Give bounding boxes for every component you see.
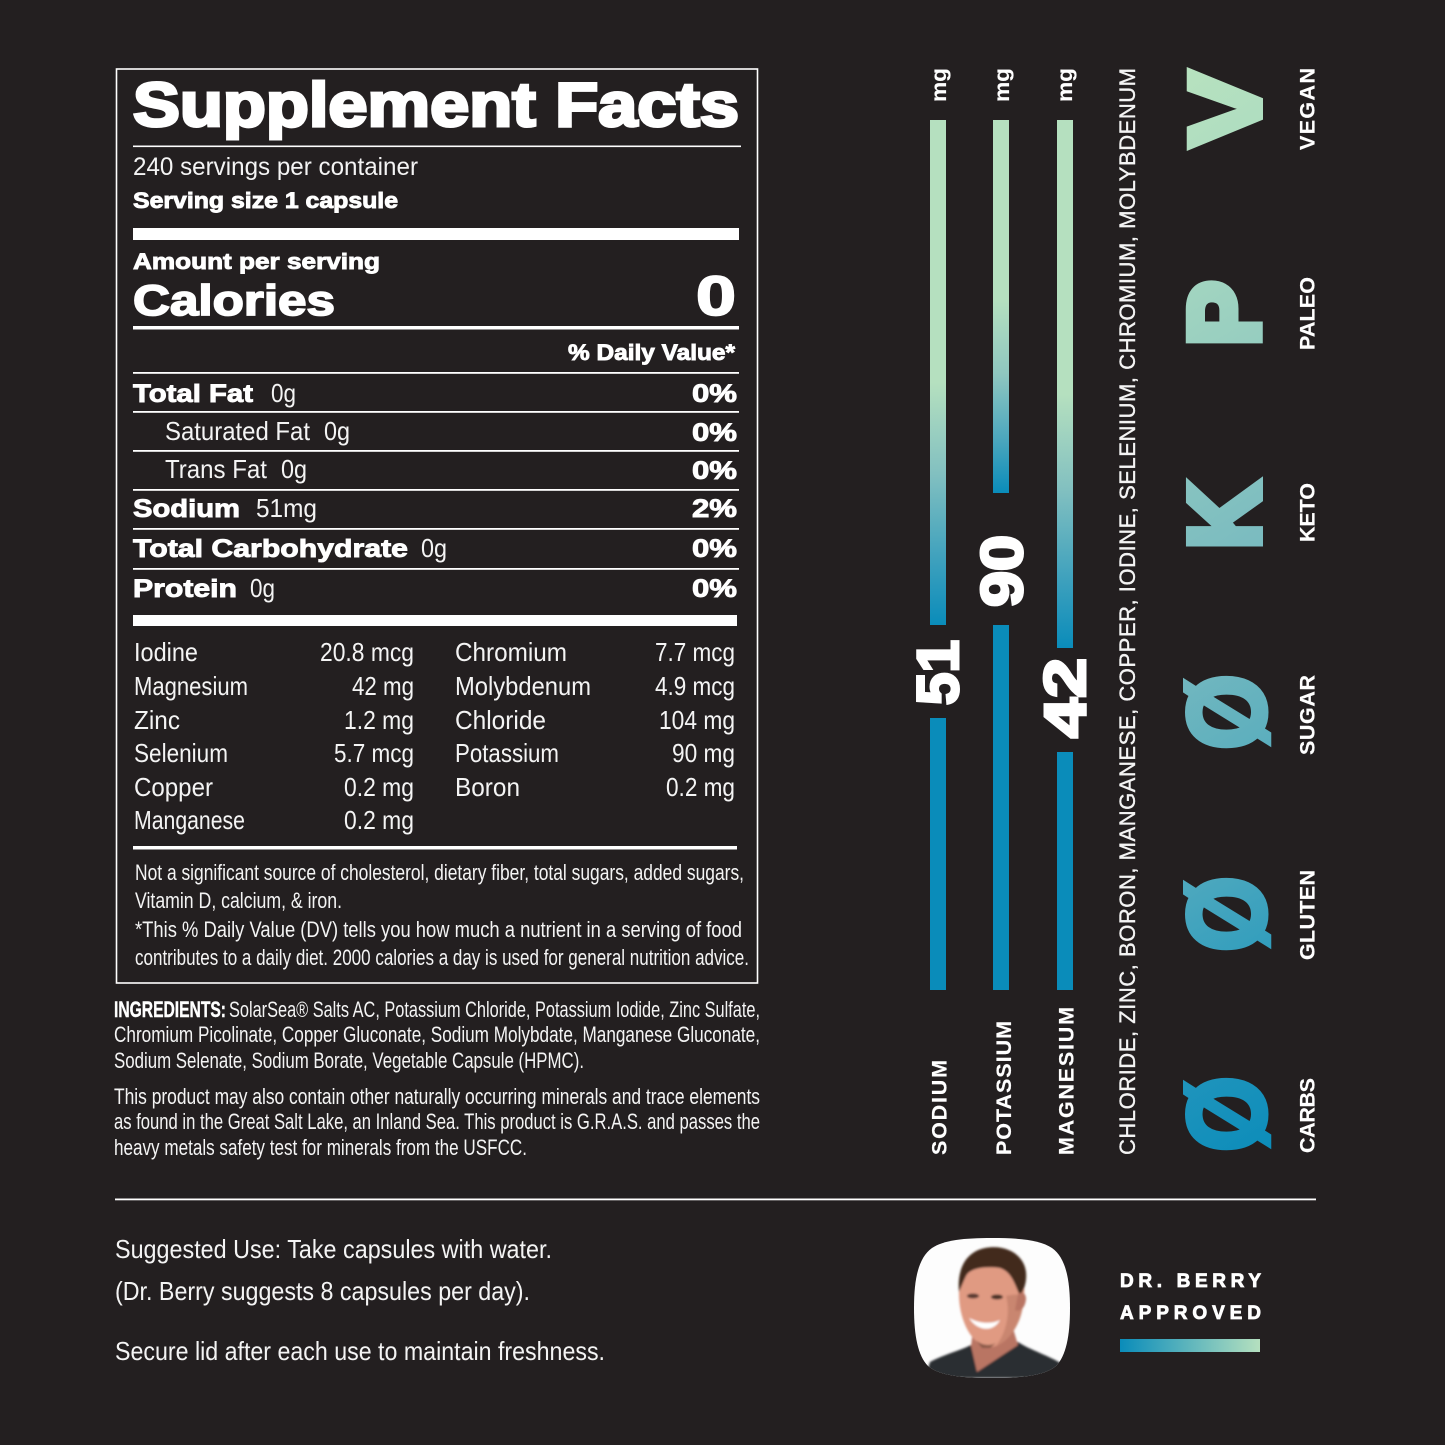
- ingredients: [114, 997, 760, 1073]
- minerals right column: 7.7 mcg: [655, 637, 735, 667]
- icon: paleo: PALEO: [1296, 277, 1320, 350]
- potassium bar chart: mg: [991, 68, 1014, 102]
- minerals left column: 0.2 mg: [344, 805, 414, 835]
- product disclaimer: as found in the Great Salt Lake, an Inland Sea. This product is G.R.A.S. and passes the: [114, 1109, 760, 1134]
- row: trans fat: Trans Fat: [165, 454, 268, 484]
- calories: [133, 249, 736, 327]
- icon: vegan: [1168, 68, 1320, 150]
- row: saturated fat: [165, 416, 737, 447]
- icon: keto: [1169, 483, 1320, 549]
- minerals left column: 1.2 mg: [344, 705, 414, 735]
- ingredients: Chromium Picolinate, Copper Gluconate, Sodium Molybdate, Manganese Gluconate,: [114, 1022, 760, 1047]
- product disclaimer: [114, 1084, 760, 1160]
- sodium bar chart: 51: [906, 640, 971, 705]
- minerals left column: Manganese: [134, 805, 245, 835]
- minerals right column: Boron: [455, 772, 520, 802]
- minerals left column: [134, 637, 414, 835]
- footnotes: [135, 860, 749, 970]
- icon: vegan: VEGAN: [1296, 68, 1320, 150]
- calories: Calories: [133, 277, 335, 325]
- minerals right column: 90 mg: [672, 738, 735, 768]
- row: saturated fat: 0%: [692, 419, 737, 447]
- ingredients: SolarSea® Salts AC, Potassium Chloride, Potassium Iodide, Zinc Sulfate,: [229, 997, 760, 1022]
- minerals left column: Selenium: [134, 738, 228, 768]
- icon: keto: K: [1169, 483, 1281, 549]
- icon: zero sugar: Ø: [1166, 674, 1289, 750]
- ingredients: INGREDIENTS:: [114, 997, 226, 1022]
- row: total fat: 0g: [271, 378, 296, 408]
- row: sodium: 2%: [692, 495, 737, 523]
- row: protein: [133, 573, 737, 603]
- minerals right column: 0.2 mg: [666, 772, 735, 802]
- minerals right column: [455, 637, 735, 802]
- approval label: [1120, 1271, 1261, 1352]
- row: total carbohydrate: 0g: [421, 533, 447, 563]
- icon: paleo: P: [1169, 281, 1281, 346]
- potassium bar chart: [970, 68, 1035, 1155]
- minerals left column: 5.7 mcg: [334, 738, 414, 768]
- icon: zero sugar: [1166, 674, 1320, 755]
- approval label: APPROVED: [1120, 1303, 1261, 1324]
- minerals left column: Zinc: [134, 705, 180, 735]
- minerals left column: 42 mg: [352, 671, 414, 701]
- footnotes: *This % Daily Value (DV) tells you how much a nutrient in a serving of food: [135, 917, 742, 942]
- row: saturated fat: 0g: [324, 416, 350, 446]
- minerals right column: Chloride: [455, 705, 546, 735]
- row: total fat: Total Fat: [133, 380, 254, 408]
- potassium bar chart: 90: [970, 535, 1035, 607]
- row: protein: 0%: [692, 575, 737, 603]
- magnesium bar chart: [1033, 68, 1098, 1155]
- row: protein: Protein: [133, 575, 237, 603]
- calories: Amount per serving: [133, 249, 380, 274]
- row: total fat: [133, 378, 737, 408]
- magnesium bar chart: mg: [1054, 68, 1077, 102]
- suggested use text: Suggested Use: Take capsules with water.: [115, 1234, 552, 1264]
- suggested use text: Secure lid after each use to maintain freshness.: [115, 1336, 605, 1366]
- calories: 0: [696, 264, 736, 327]
- servings info: [133, 153, 418, 213]
- servings info: 240 servings per container: [133, 153, 418, 181]
- row: sodium: [133, 493, 737, 523]
- footnotes: contributes to a daily diet. 2000 calories a day is used for general nutrition advice.: [135, 945, 749, 970]
- icon: zero sugar: SUGAR: [1296, 675, 1320, 755]
- row: total carbohydrate: 0%: [692, 535, 737, 563]
- daily value header: % Daily Value*: [568, 340, 735, 365]
- minerals right column: Molybdenum: [455, 671, 591, 701]
- product disclaimer: This product may also contain other naturally occurring minerals and trace elements: [114, 1084, 760, 1109]
- icon: zero gluten: Ø: [1166, 876, 1289, 952]
- title: Supplement Facts: [133, 71, 739, 140]
- row: trans fat: [165, 454, 737, 485]
- minerals left column: Magnesium: [134, 671, 248, 701]
- minerals right column: Chromium: [455, 637, 567, 667]
- servings info: Serving size 1 capsule: [133, 188, 398, 213]
- panel: supplement facts: [116, 69, 758, 983]
- minerals left column: 0.2 mg: [344, 772, 414, 802]
- sodium bar chart: [906, 68, 971, 1155]
- product disclaimer: heavy metals safety test for minerals from the USFCC.: [114, 1135, 527, 1160]
- row: saturated fat: Saturated Fat: [165, 416, 311, 446]
- minerals left column: Copper: [134, 772, 213, 802]
- row: protein: 0g: [250, 573, 275, 603]
- icon: zero carbs: Ø: [1166, 1076, 1289, 1152]
- approval label: DR. BERRY: [1120, 1271, 1261, 1292]
- footnotes: Vitamin D, calcium, & iron.: [135, 888, 342, 913]
- icon: zero gluten: GLUTEN: [1296, 870, 1320, 960]
- portrait: Dr. Berry: [914, 1238, 1070, 1378]
- sodium bar chart: mg: [928, 68, 951, 102]
- footnotes: Not a significant source of cholesterol, dietary fiber, total sugars, added sugars,: [135, 860, 744, 885]
- trace minerals list: CHLORIDE, ZINC, BORON, MANGANESE, COPPER, IODINE, SELENIUM, CHROMIUM, MOLYBDENUM: [1115, 68, 1140, 1155]
- magnesium bar chart: 42: [1033, 658, 1098, 738]
- row: sodium: Sodium: [133, 495, 240, 523]
- row: total carbohydrate: Total Carbohydrate: [133, 535, 408, 563]
- row: trans fat: 0g: [281, 454, 307, 484]
- row: total carbohydrate: [133, 533, 737, 563]
- sodium bar chart: SODIUM: [928, 1060, 952, 1155]
- icon: keto: KETO: [1296, 483, 1320, 542]
- minerals right column: 104 mg: [659, 705, 735, 735]
- icon: zero carbs: CARBS: [1296, 1078, 1320, 1153]
- icon: vegan: V: [1168, 71, 1282, 147]
- minerals left column: 20.8 mcg: [320, 637, 414, 667]
- minerals right column: Potassium: [455, 738, 559, 768]
- magnesium bar chart: MAGNESIUM: [1054, 1007, 1078, 1155]
- minerals left column: Iodine: [134, 637, 198, 667]
- potassium bar chart: POTASSIUM: [992, 1021, 1016, 1155]
- suggested use text: [115, 1234, 605, 1366]
- row: trans fat: 0%: [692, 457, 737, 485]
- icon: paleo: [1169, 277, 1320, 350]
- row: sodium: 51mg: [256, 493, 317, 523]
- ingredients: Sodium Selenate, Sodium Borate, Vegetable Capsule (HPMC).: [114, 1048, 584, 1073]
- suggested use text: (Dr. Berry suggests 8 capsules per day).: [115, 1276, 530, 1306]
- row: total fat: 0%: [692, 380, 737, 408]
- minerals right column: 4.9 mcg: [655, 671, 735, 701]
